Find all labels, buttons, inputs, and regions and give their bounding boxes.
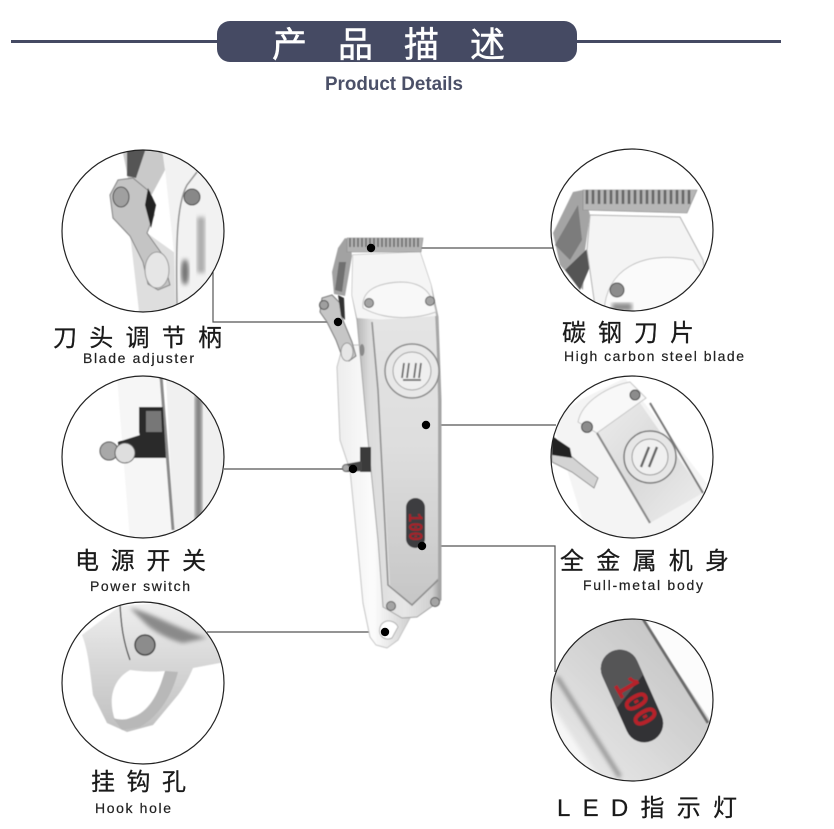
LED display (402, 498, 425, 548)
clipper front body (352, 252, 441, 618)
panel: hook hole detail (62, 600, 225, 764)
top cover (352, 252, 436, 320)
LED digits: 100 (603, 670, 665, 736)
screws (364, 296, 440, 610)
header banner (11, 21, 781, 65)
title: 产品描述 (272, 26, 505, 65)
clipper back shell (337, 345, 410, 648)
LED capsule (600, 650, 664, 743)
label: carbon steel blade: High carbon steel blade (564, 348, 744, 364)
label: hook hole: Hook hole (95, 800, 171, 816)
label: LED indicator: LED指示灯 (557, 795, 737, 822)
clipper: central product photo (320, 238, 441, 648)
label: blade adjuster: 刀头调节柄 (53, 325, 222, 352)
panel: LED indicator detail (545, 615, 720, 785)
emblem (385, 344, 439, 398)
label: hook hole: 挂钩孔 (91, 769, 186, 796)
blade adjuster (320, 295, 364, 361)
blade guide (332, 238, 352, 296)
leader lines (207, 248, 556, 672)
label: carbon steel blade (562, 320, 744, 364)
panel: full-metal body detail (551, 376, 720, 545)
panel: blade adjuster detail (62, 148, 235, 320)
body shading strip (372, 322, 438, 605)
label: power switch (75, 548, 206, 594)
label: full-metal body: Full-metal body (583, 577, 703, 593)
label: blade adjuster (53, 325, 222, 366)
label: blade adjuster: Blade adjuster (83, 350, 194, 366)
subtitle: Product Details (325, 74, 463, 95)
power switch (342, 447, 371, 472)
main inner panel (372, 316, 438, 605)
label: full-metal body (560, 548, 729, 593)
anchor dots (334, 244, 430, 636)
panel: power switch detail (62, 376, 230, 540)
label: power switch: 电源开关 (75, 548, 206, 575)
label: carbon steel blade: 碳钢刀片 (562, 320, 694, 347)
blade teeth (347, 238, 423, 252)
label: hook hole (91, 769, 186, 816)
label: full-metal body: 全金属机身 (560, 548, 729, 575)
hook hole (379, 621, 398, 639)
panel: carbon steel blade detail (551, 149, 713, 320)
label: power switch: Power switch (90, 578, 190, 594)
LED display: 100 (402, 513, 425, 541)
